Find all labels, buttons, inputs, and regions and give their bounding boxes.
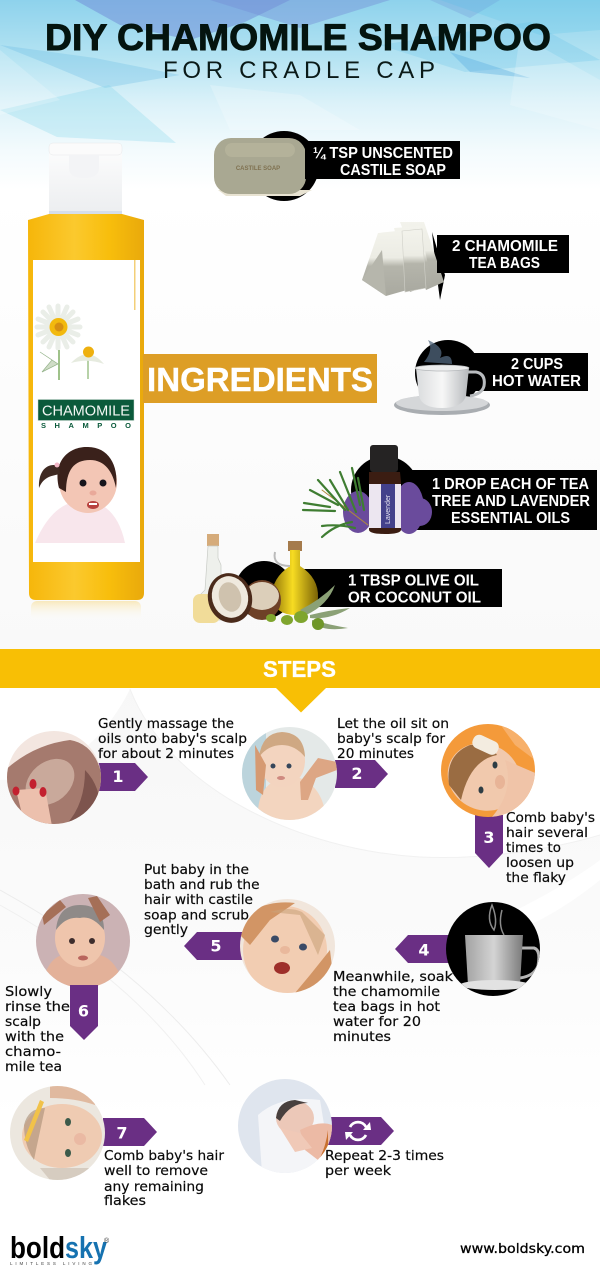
small oil bottle: [193, 534, 221, 623]
logo: boldsky: [10, 1230, 110, 1266]
text 7: any remaining: [104, 1179, 204, 1195]
logo: boldsky: bold: [10, 1230, 65, 1265]
label: ¼ TSP UNSCENTED: [313, 145, 453, 162]
subtitle: FOR CRADLE CAP: [163, 57, 435, 84]
text 4: the chamomile: [333, 984, 440, 1000]
text 6: rinse the: [5, 999, 70, 1015]
arrow repeat: [328, 1117, 394, 1145]
ingredient: hot water: [394, 340, 588, 415]
lavender bottle: [369, 445, 401, 534]
text 3: the flaky: [506, 870, 566, 886]
step 4: [333, 902, 540, 1045]
text 3: hair several: [506, 825, 588, 841]
cup and saucer: [394, 340, 490, 415]
text 2: [337, 716, 449, 762]
text 3: loosen up: [506, 855, 574, 871]
logo: boldsky: ®: [104, 1237, 110, 1245]
text 4: Meanwhile, soak: [333, 969, 453, 985]
label: [290, 569, 502, 607]
text 7: well to remove: [104, 1163, 208, 1179]
text 2: baby's scalp for: [337, 731, 445, 747]
text 2: 20 minutes: [337, 746, 414, 762]
soap bar: CASTILE SOAP: [236, 166, 280, 172]
baby photo on label: [35, 447, 125, 543]
arrow 5: 5: [210, 936, 222, 956]
text 2: Let the oil sit on: [337, 716, 449, 732]
label: 1 TBSP OLIVE OIL: [348, 572, 479, 590]
tea tree sprig: [303, 468, 368, 537]
label: 1 DROP EACH OF TEA: [432, 476, 589, 493]
ingredients heading: INGREDIENTS: [147, 361, 373, 398]
label: [410, 470, 597, 530]
ingredient: tea bags: [362, 222, 569, 300]
bottle body: [28, 214, 144, 600]
label: 2 CUPS: [511, 356, 563, 373]
step 2: [242, 716, 449, 820]
logo: boldsky: LIMITLESS LIVING: [10, 1261, 92, 1266]
text 5: bath and rub the: [144, 877, 260, 893]
soap bar: [214, 138, 306, 194]
olive oil jug: [272, 541, 318, 615]
text repeat: per week: [325, 1163, 391, 1179]
label: [437, 235, 569, 273]
black backing: [415, 340, 481, 406]
arrow 4: 4: [418, 940, 430, 960]
olives and leaves: [266, 585, 350, 630]
label: 2 CHAMOMILE: [452, 238, 558, 255]
ingredient: essential oils: [303, 445, 597, 537]
arrow 6: 6: [78, 1002, 89, 1020]
text 5: [144, 862, 260, 938]
arrow 7: 7: [116, 1124, 128, 1142]
text 1: Gently massage the: [98, 716, 234, 732]
step 3: [437, 724, 595, 886]
arrow 7: [103, 1118, 157, 1146]
text 3: Comb baby's: [506, 810, 595, 826]
steps band: [0, 649, 600, 712]
label: [472, 353, 588, 391]
arrow 1: [98, 763, 148, 791]
text 7: flakes: [104, 1193, 146, 1209]
arrow 5: [184, 932, 244, 960]
text repeat: [325, 1148, 444, 1179]
text 7: Comb baby's hair: [104, 1148, 224, 1164]
ingredient: castile soap: [214, 131, 460, 201]
bottle illustration: [28, 143, 144, 621]
text 3: times to: [506, 840, 561, 856]
arrow 3: 3: [483, 828, 495, 847]
step 1: [0, 716, 247, 830]
photo: cup of tea: [446, 902, 540, 996]
label: [305, 141, 460, 179]
bottle reflection: [31, 601, 141, 621]
coconut halves: [202, 568, 281, 628]
bottle cap: [49, 143, 122, 214]
black backing: [235, 561, 293, 619]
text 4: minutes: [333, 1029, 391, 1045]
label: CASTILE SOAP: [340, 162, 446, 179]
text 4: [333, 969, 453, 1045]
photo: baby massage: [242, 727, 337, 820]
text 4: water for 20: [333, 1014, 421, 1030]
photo: scalp: [7, 731, 101, 824]
text 4: tea bags in hot: [333, 999, 440, 1015]
text 5: Put baby in the: [144, 862, 249, 878]
title: DIY CHAMOMILE SHAMPOO: [45, 17, 551, 58]
green name band: [38, 400, 134, 420]
bags: [362, 222, 444, 296]
text 6: chamo-: [5, 1044, 61, 1060]
text 1: oils onto baby's scalp: [98, 731, 247, 747]
arrow 6: [70, 985, 98, 1040]
label: ESSENTIAL OILS: [451, 510, 570, 527]
text 6: [5, 984, 70, 1075]
green name band: CHAMOMILE: [42, 404, 130, 420]
photo: combing hair: [441, 724, 535, 817]
step 5: [144, 862, 335, 994]
text 1: [98, 716, 247, 762]
lavender bunches: [343, 482, 432, 534]
steps band: STEPS: [263, 656, 336, 682]
soap tray: [218, 190, 312, 196]
text 6: scalp: [5, 1014, 41, 1030]
step 7: [10, 1086, 224, 1209]
title: [45, 17, 551, 84]
text 6: Slowly: [5, 984, 52, 1000]
text 5: hair with castile: [144, 892, 253, 908]
arrow 1: 1: [112, 767, 124, 786]
icon: refresh: [345, 1122, 371, 1140]
arrow 2: [335, 760, 388, 788]
black backing: [351, 456, 419, 524]
photo: combing newborn: [10, 1086, 105, 1180]
text repeat: Repeat 2-3 times: [325, 1148, 444, 1164]
arrow 4: [395, 935, 450, 963]
photo: baby in bath: [240, 899, 335, 994]
lavender bottle: Lavender: [385, 494, 392, 524]
step 6: [5, 894, 130, 1075]
label: HOT WATER: [492, 373, 581, 390]
bottle label: [33, 260, 140, 562]
arrow 2: 2: [351, 764, 363, 783]
step repeat: [238, 1079, 444, 1179]
label: TREE AND LAVENDER: [432, 493, 590, 510]
website url: www.boldsky.com: [460, 1241, 585, 1257]
text 7: [104, 1148, 224, 1209]
logo: boldsky: sky: [65, 1230, 108, 1265]
steps background swirl: [0, 689, 600, 1120]
text 6: with the: [5, 1029, 64, 1045]
ingredient: olive and coconut oil: [193, 534, 502, 630]
label: OR COCONUT OIL: [348, 590, 481, 606]
icon: chamomile flower: [37, 306, 104, 380]
text 1: for about 2 minutes: [98, 746, 234, 762]
photo: rinsing hair: [36, 894, 130, 990]
shampoo subtext: SHAMPOO: [41, 421, 131, 430]
photo: sleeping newborn: [238, 1079, 332, 1173]
text 6: mile tea: [5, 1059, 62, 1075]
text 3: [506, 810, 595, 886]
text 5: gently: [144, 922, 188, 938]
text 5: soap and scrub: [144, 908, 249, 924]
black backing circle: [249, 131, 319, 201]
label: TEA BAGS: [469, 255, 540, 272]
arrow 3: [475, 815, 503, 868]
